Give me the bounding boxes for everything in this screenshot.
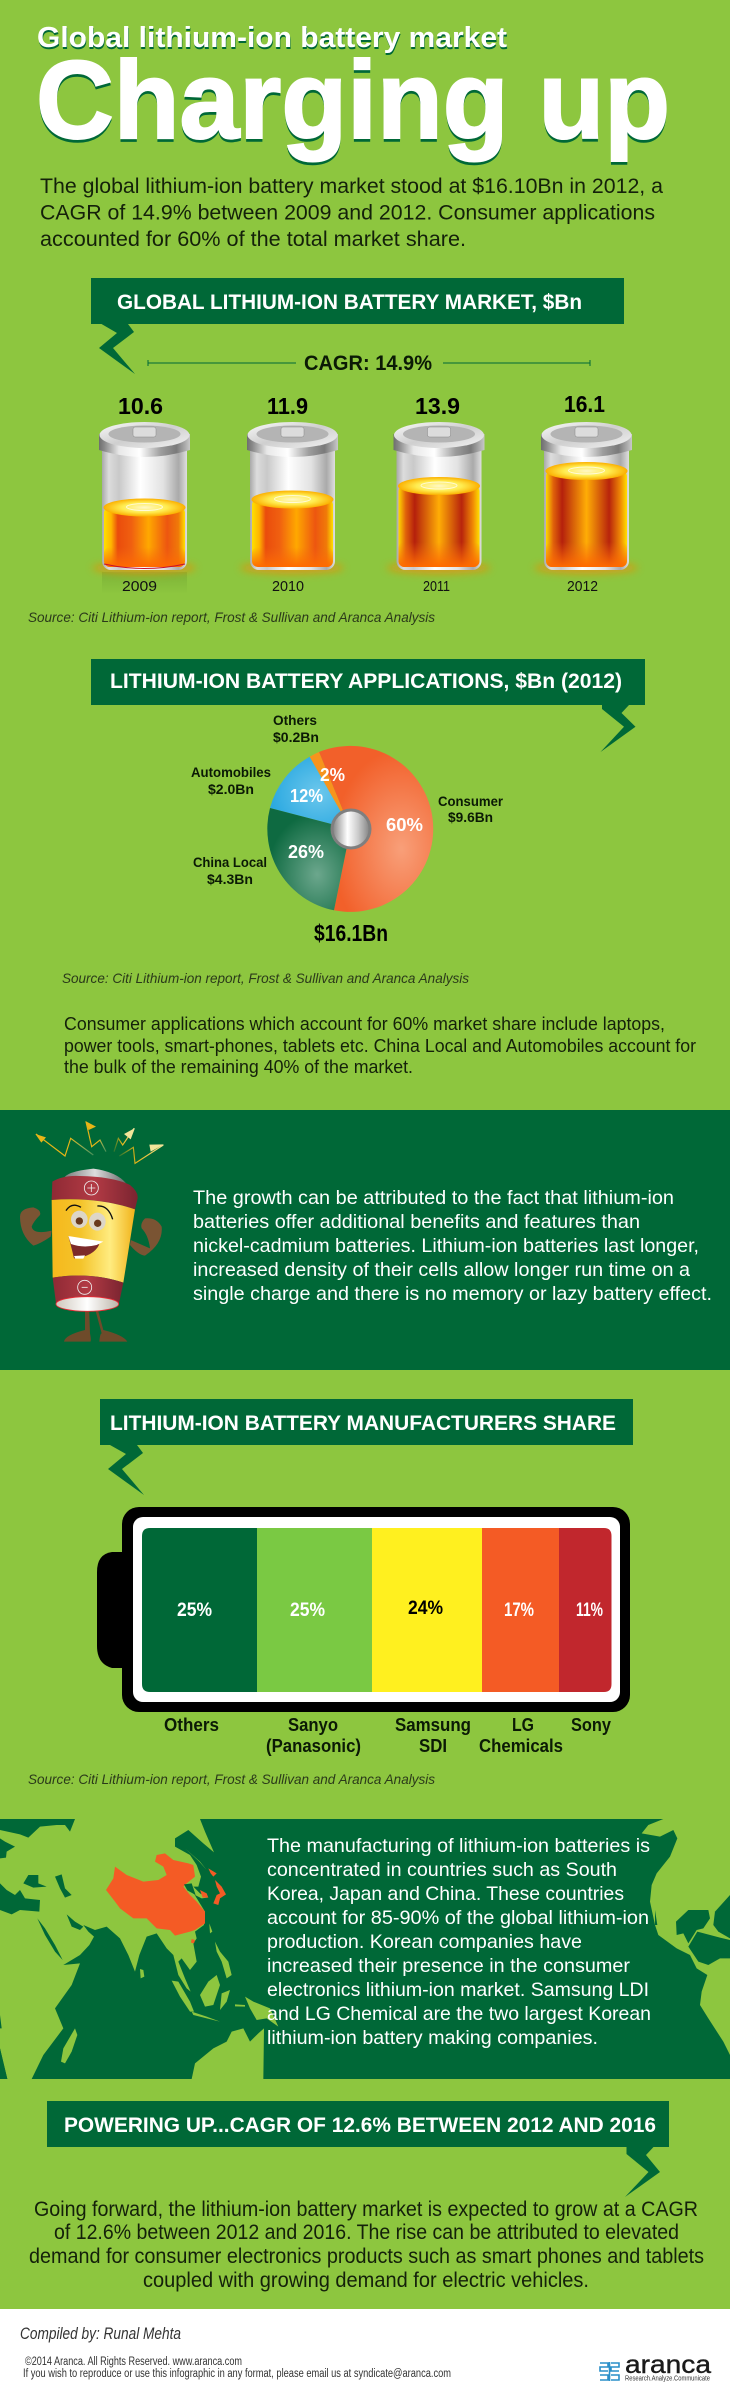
outlook text (29, 2198, 704, 2292)
manufacturer labels: LG (512, 1715, 534, 1735)
outlook text: demand for consumer electronics products such as smart phones and tablets (29, 2245, 704, 2268)
manufacturer labels: Others (164, 1715, 219, 1735)
segment: sony (559, 1528, 612, 1692)
applications text: the bulk of the remaining 40% of the market. (64, 1057, 413, 1077)
growth text: increased density of their cells allow longer run time on a (193, 1259, 690, 1281)
map text: account for 85-90% of the global lithium-ion (267, 1907, 649, 1929)
credit: Compiled by: Runal Mehta (20, 2324, 181, 2343)
manufacturer labels: Sony (571, 1715, 611, 1735)
title (36, 22, 670, 165)
source 3: Source: Citi Lithium-ion report, Frost & Sullivan and Aranca Analysis (28, 1771, 435, 1787)
yellow sea (184, 1883, 196, 1895)
segment percentages: 17% (504, 1600, 534, 1621)
banner: manufacturers (100, 1399, 633, 1495)
subtitle: Global lithium-ion battery market (37, 22, 507, 54)
CAGR indicator (148, 352, 590, 375)
map text: electronics lithium-ion market. Samsung LDI (267, 1979, 649, 2001)
pie labels: $0.2Bn (273, 730, 319, 745)
battery 2010 (240, 393, 344, 595)
map text: lithium-ion battery making companies. (267, 2027, 598, 2049)
segment: sanyo (257, 1528, 372, 1692)
pie labels: $4.3Bn (207, 872, 253, 887)
growth text: batteries offer additional benefits and features than (193, 1211, 640, 1233)
subtitle shadow: Global lithium-ion battery market (38, 24, 508, 56)
slice percentages: 26% (288, 842, 324, 862)
banner: applications: LITHIUM-ION BATTERY APPLICATIONS, $Bn (2012) (110, 670, 622, 693)
banner: applications (91, 659, 645, 752)
sparks (35, 1121, 164, 1163)
segment percentages: 11% (576, 1600, 603, 1621)
banner: manufacturers: LITHIUM-ION BATTERY MANUFACTURERS SHARE (110, 1412, 616, 1435)
bottom band (53, 1276, 123, 1303)
outlook text: coupled with growing demand for electric vehicles. (143, 2269, 589, 2292)
pie labels: China Local (193, 855, 267, 870)
slice percentages: 60% (386, 815, 423, 835)
aranca logo (600, 2351, 711, 2382)
arms (20, 1207, 162, 1256)
battery 2012 (534, 391, 638, 595)
pie labels: $2.0Bn (208, 782, 254, 797)
map text: Korea, Japan and China. These countries (267, 1883, 624, 1905)
map: eurasia, africa, australia (0, 1819, 278, 2079)
manufacturer labels: (Panasonic) (266, 1736, 361, 1756)
battery 2011: 2011 (423, 578, 450, 595)
source 2: Source: Citi Lithium-ion report, Frost & Sullivan and Aranca Analysis (62, 970, 469, 986)
banner: global market: GLOBAL LITHIUM-ION BATTERY MARKET, $Bn (117, 291, 582, 314)
growth text (193, 1187, 712, 1305)
segment percentages (177, 1598, 603, 1621)
map text: and LG Chemical are the two largest Korean (267, 2003, 651, 2025)
segment: lg (482, 1528, 559, 1692)
segment: samsung (372, 1528, 482, 1692)
banner: powering up: POWERING UP...CAGR OF 12.6% BETWEEN 2012 AND 2016 (64, 2114, 656, 2137)
logo name: aranca (625, 2351, 711, 2379)
map text: increased their presence in the consumer (267, 1955, 631, 1977)
yellow body (52, 1199, 135, 1283)
slice: others (310, 752, 350, 829)
slice percentages: 12% (290, 786, 323, 806)
battery share chart (97, 1507, 630, 1756)
map: americas (642, 1819, 730, 2055)
growth text: nickel-cadmium batteries. Lithium-ion batteries last longer, (193, 1235, 699, 1257)
slice: china local (267, 808, 350, 910)
banner: global market (91, 278, 624, 374)
outlook text: Going forward, the lithium-ion battery market is expected to grow at a CAGR (34, 2198, 698, 2221)
lid (63, 1169, 127, 1184)
hub (330, 808, 372, 850)
CAGR indicator: CAGR: 14.9% (304, 352, 432, 375)
source 1: Source: Citi Lithium-ion report, Frost & Sullivan and Aranca Analysis (28, 609, 435, 625)
banner: powering up (47, 2101, 669, 2197)
mouth (68, 1236, 99, 1258)
battery terminal (97, 1552, 124, 1668)
growth text: single charge and there is no memory or lazy battery effect. (193, 1283, 712, 1305)
intro text: The global lithium-ion battery market stood at $16.10Bn in 2012, a (40, 174, 663, 198)
battery casing (122, 1507, 630, 1712)
footer (0, 2309, 730, 2395)
segment percentages: 24% (408, 1598, 443, 1619)
intro text: CAGR of 14.9% between 2009 and 2012. Consumer applications (40, 200, 655, 224)
battery chart (92, 391, 638, 595)
battery 2011 (386, 393, 490, 595)
copyright (23, 2356, 451, 2380)
logo mark (600, 2362, 619, 2381)
segment percentages: 25% (177, 1600, 212, 1621)
taiwan (191, 1939, 195, 1943)
top band (52, 1176, 138, 1209)
pie total: $16.1Bn (314, 920, 388, 946)
main title shadow: Charging up (36, 42, 670, 165)
pie chart (191, 713, 504, 946)
slice: automobiles (270, 757, 350, 829)
eyes (71, 1211, 88, 1228)
battery 2011: 13.9 (415, 393, 460, 419)
pie labels: $9.6Bn (448, 810, 493, 825)
base (56, 1297, 119, 1311)
battery 2010: 2010 (272, 578, 304, 595)
logo tagline: Research.Analyze.Communicate (625, 2376, 710, 2382)
copyright: ©2014 Aranca. All Rights Reserved. www.aranca.com (25, 2356, 242, 2368)
manufacturer labels (164, 1715, 611, 1756)
growth text: The growth can be attributed to the fact that lithium-ion (193, 1187, 674, 1209)
battery interior (133, 1517, 620, 1702)
panel: growth (0, 1110, 730, 1370)
china (106, 1853, 226, 1943)
icon: battery mascot (20, 1121, 164, 1342)
manufacturer labels: SDI (419, 1736, 447, 1756)
map text: The manufacturing of lithium-ion batteries is (267, 1835, 650, 1857)
slice: consumer (319, 746, 433, 912)
pie labels (191, 713, 504, 887)
intro text (40, 174, 663, 251)
applications text (64, 1014, 696, 1077)
map text: production. Korean companies have (267, 1931, 582, 1953)
legs (64, 1305, 127, 1342)
panel: world map (0, 1819, 730, 2079)
map text: concentrated in countries such as South (267, 1859, 617, 1881)
intro text: accounted for 60% of the total market share. (40, 227, 466, 251)
pie labels: Automobiles (191, 765, 271, 780)
terminals (78, 1181, 98, 1294)
map text (267, 1835, 651, 2049)
manufacturer labels: Chemicals (479, 1736, 563, 1756)
battery 2010: 11.9 (267, 393, 308, 419)
slice percentages (288, 765, 423, 862)
battery 2009 (92, 393, 196, 595)
segment: others (142, 1528, 257, 1692)
outlook text: of 12.6% between 2012 and 2016. The rise can be attributed to elevated (54, 2221, 679, 2244)
battery 2009: 10.6 (118, 393, 163, 419)
segment percentages: 25% (290, 1600, 325, 1621)
korea and japan (200, 1868, 226, 1905)
applications text: Consumer applications which account for 60% market share include laptops, (64, 1014, 665, 1034)
battery 2012: 2012 (567, 578, 598, 595)
battery 2012: 16.1 (564, 391, 605, 417)
battery 2009: 2009 (122, 578, 157, 595)
manufacturer labels: Sanyo (288, 1715, 338, 1735)
copyright: If you wish to reproduce or use this infographic in any format, please email us at syndicate@aranca.com (23, 2368, 451, 2380)
slice percentages: 2% (320, 765, 345, 785)
applications text: power tools, smart-phones, tablets etc. China Local and Automobiles account for (64, 1036, 696, 1056)
pie labels: Others (273, 713, 317, 728)
main title: Charging up (36, 39, 670, 162)
manufacturer labels: Samsung (395, 1715, 471, 1735)
pie labels: Consumer (438, 794, 504, 809)
